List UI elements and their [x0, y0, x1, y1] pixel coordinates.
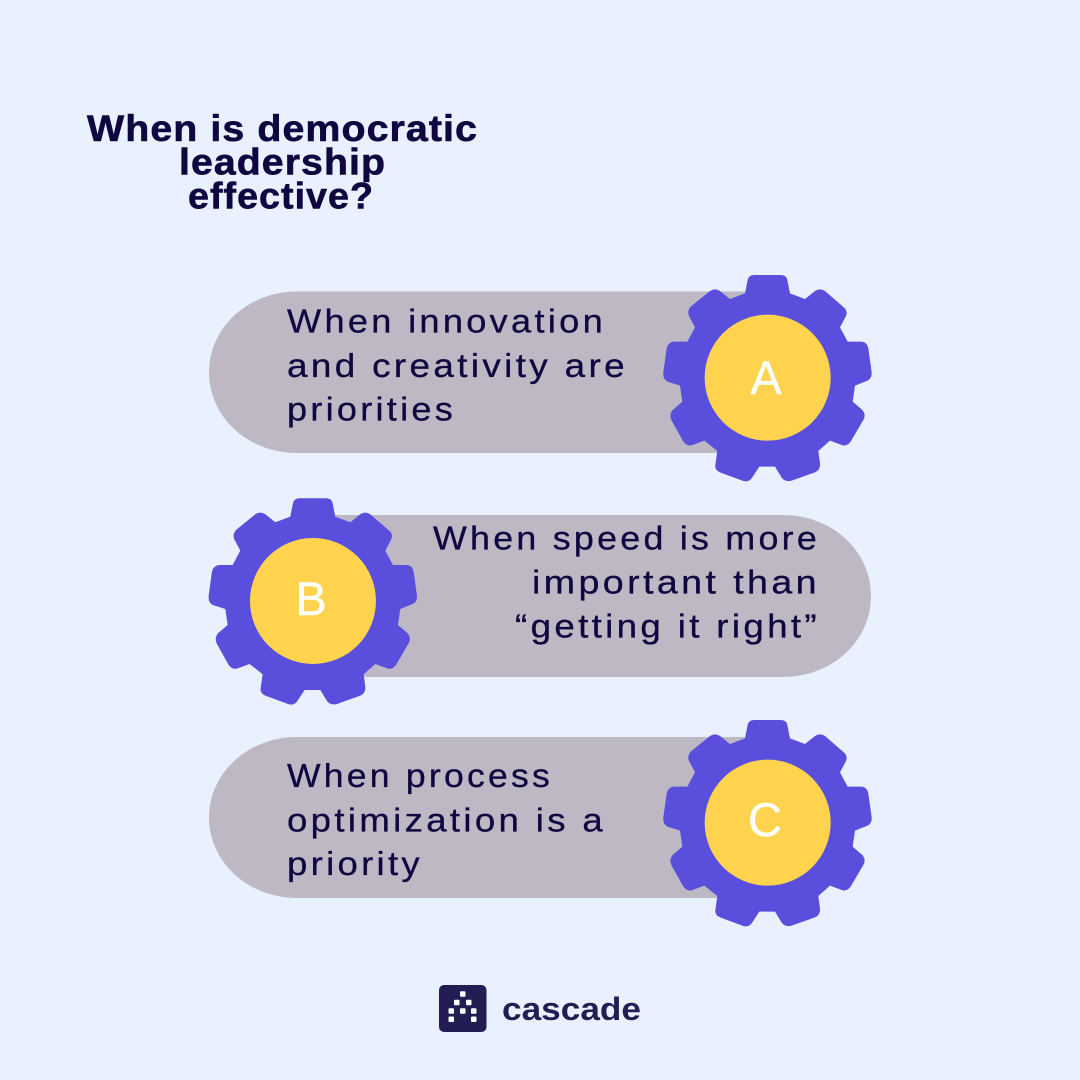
title [87, 108, 478, 216]
title: leadership [179, 142, 386, 182]
panel: option A [209, 275, 872, 481]
text A: and creativity are [287, 347, 628, 384]
text C: When process [287, 757, 553, 794]
letter B: B [295, 572, 327, 625]
text B: important than [532, 564, 820, 600]
title: When is democratic [87, 108, 478, 149]
panel: option C [209, 720, 872, 926]
text A: priorities [287, 390, 456, 428]
letter C: C [748, 793, 782, 846]
pill C [209, 737, 760, 898]
text C: optimization is a [287, 802, 606, 838]
text C [287, 757, 606, 882]
logo: cascade [439, 985, 641, 1032]
wordmark: cascade [502, 991, 641, 1027]
text A: When innovation [287, 302, 606, 340]
text B: When speed is more [433, 520, 820, 556]
text A [287, 302, 628, 428]
icon: cascade mark [439, 985, 486, 1032]
text C: priority [287, 845, 423, 882]
icon: gear C [663, 720, 872, 926]
title: effective? [188, 176, 374, 216]
icon: gear A [663, 275, 872, 481]
letter A: A [750, 351, 782, 404]
text B: “getting it right” [515, 608, 820, 644]
icon: gear B [209, 498, 417, 705]
panel: option B [209, 498, 871, 705]
text B [433, 520, 820, 644]
pill B [330, 515, 871, 677]
pill A [209, 292, 760, 453]
